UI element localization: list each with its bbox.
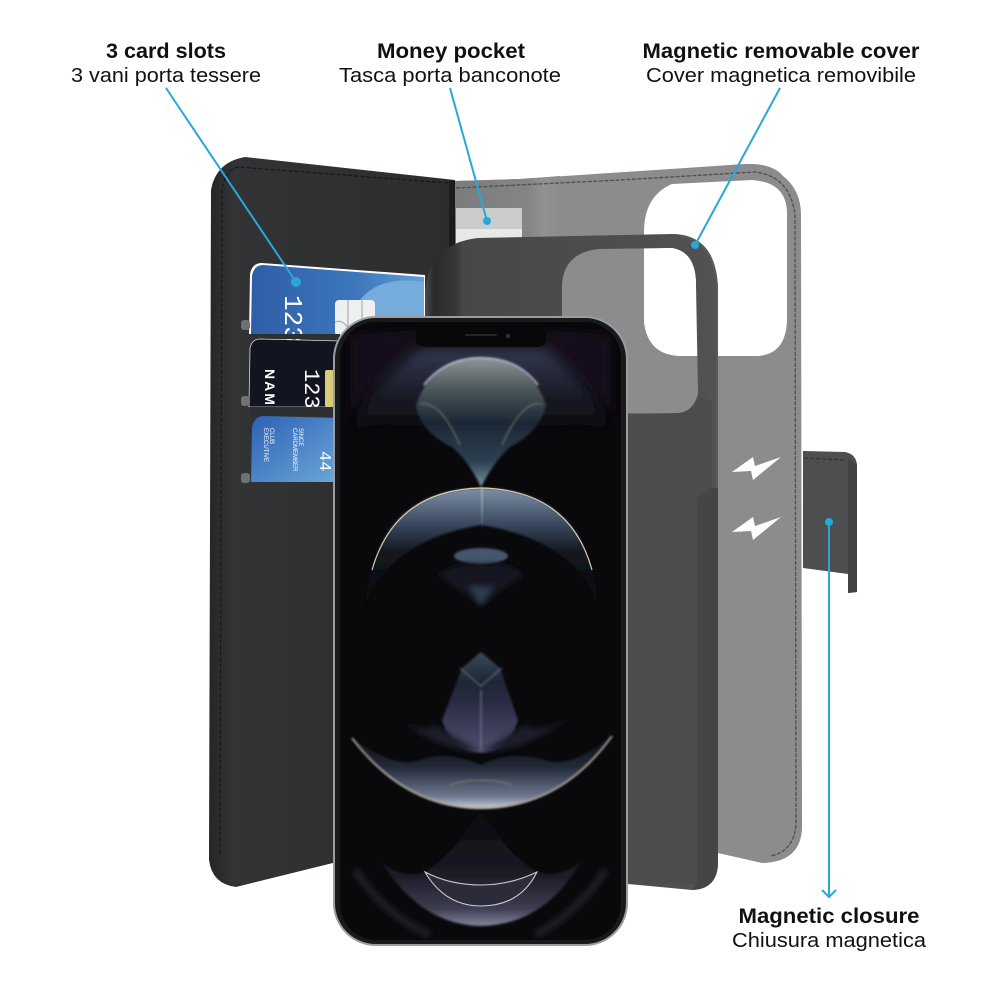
- small bowl: [425, 872, 537, 906]
- wallet stitching: [456, 172, 796, 856]
- centre ray: [481, 488, 483, 530]
- subheading: Chiusura magnetica: [732, 929, 927, 952]
- bolt 1: [732, 457, 781, 480]
- cutout window: [644, 248, 696, 356]
- heading: 3 card slots: [106, 40, 226, 63]
- second dome: [369, 486, 594, 586]
- card 3: CARDMEMBER: [291, 428, 297, 472]
- tab fold: [848, 458, 857, 593]
- main bowl rim: [352, 736, 612, 808]
- pointer line: [691, 88, 780, 249]
- ray diamond: [460, 668, 502, 752]
- grey wallet seen through cover: [562, 249, 698, 414]
- speaker: [465, 334, 497, 336]
- subheading: Tasca porta banconote: [339, 64, 561, 87]
- corner tints: [350, 331, 611, 407]
- flap stitching: [220, 167, 448, 855]
- bolt 2: [732, 517, 781, 540]
- tab stitching: [804, 458, 846, 460]
- bottom arcs: [355, 870, 606, 935]
- phone screen: [340, 322, 621, 940]
- mid form: [437, 564, 525, 605]
- card 2: [249, 339, 340, 409]
- magnetic removable cover: [425, 234, 718, 890]
- card chip: [335, 300, 375, 336]
- upper dome: [362, 342, 600, 422]
- heading: Money pocket: [377, 40, 525, 63]
- card number: 123: [277, 295, 307, 342]
- upper bowl: [411, 722, 562, 754]
- icon: magnet bolts: [732, 457, 781, 540]
- phone: [334, 317, 627, 945]
- callout: 3 card slots: [71, 40, 301, 287]
- main bowl: [357, 742, 606, 810]
- heading: Magnetic closure: [738, 905, 920, 928]
- mid arrow: [468, 586, 494, 606]
- card 2: 123: [298, 369, 323, 409]
- teardrop top rim: [424, 358, 538, 385]
- notch: [416, 323, 546, 347]
- subheading: 3 vani porta tessere: [71, 64, 261, 87]
- card 3: EXECUTIVE: [262, 428, 268, 462]
- wallpaper: [350, 330, 614, 935]
- rainbow arc: [450, 780, 512, 785]
- slot edge 1: [250, 334, 340, 339]
- callout: magnetic removable cover: [642, 40, 920, 249]
- magnetic closure tab: [803, 451, 857, 593]
- heading: Magnetic removable cover: [642, 40, 920, 63]
- pointer line: [166, 88, 301, 287]
- pointer line: [450, 88, 491, 225]
- cover inner back panel: [628, 396, 712, 884]
- small lens: [454, 548, 508, 564]
- subheading: Cover magnetica removibile: [646, 64, 916, 87]
- money pocket: [456, 208, 522, 269]
- pointer arrow: [822, 518, 836, 897]
- card slots: [241, 263, 425, 483]
- card 2: NAM: [262, 369, 278, 407]
- cover outer rim: [680, 236, 717, 490]
- card 3: 44: [314, 451, 333, 471]
- callout: money pocket: [339, 40, 561, 225]
- card 1: [249, 263, 425, 342]
- slot notches: [241, 320, 250, 483]
- cover lower strip: [692, 488, 718, 890]
- fold shading: [449, 181, 455, 281]
- callout: magnetic closure: [732, 518, 927, 952]
- left wallet flap: [209, 157, 456, 887]
- second dome rim: [372, 488, 592, 570]
- slot edge 2: [249, 407, 340, 416]
- teardrop iridescent edges: [420, 404, 542, 445]
- lower spike and large bowl: [380, 812, 582, 926]
- spine shading: [455, 176, 560, 330]
- card 3: CLUB: [268, 428, 274, 444]
- diamond: [442, 652, 518, 753]
- front camera: [506, 334, 510, 338]
- card 3: [251, 416, 340, 482]
- phone body: [334, 317, 627, 945]
- teardrop: [416, 358, 546, 487]
- wallet right panel with camera hole: [455, 164, 802, 863]
- card 3: SINCE: [297, 428, 303, 446]
